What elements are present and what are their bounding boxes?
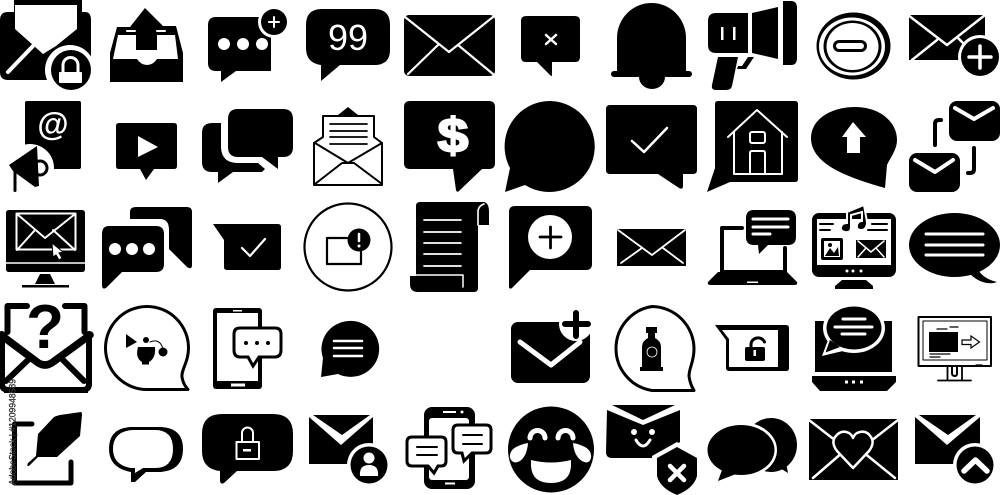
icon: oval speech bubble with lines: [909, 213, 1000, 283]
icon: smartphone with two chat bubbles: [407, 407, 491, 489]
icon: mail with up chevron badge: [915, 415, 997, 487]
icon: envelope with plus badge: [908, 15, 1000, 79]
icon: lotion bottle bubble: [616, 306, 694, 390]
icon: round speech bubble: [505, 101, 595, 192]
icon: padlock bubble: [202, 414, 293, 484]
icon: open envelope with letter: [314, 107, 382, 185]
icon: unlocked padlock in tablet bubble: [715, 325, 789, 371]
icon: at sign page with megaphone: [6, 101, 81, 192]
icon: alert window in circle: [304, 204, 392, 290]
icon: megaphone: [708, 1, 797, 90]
icon: smartphone with dots bubble: [213, 308, 281, 389]
icon: paper scroll: [410, 202, 489, 292]
icon: upload bubble: [811, 107, 897, 188]
icon: closed envelope: [404, 15, 495, 76]
icon: envelope with question mark: [1, 293, 90, 393]
icon: desktop monitor with mail and cursor: [6, 210, 85, 288]
icon: laptop with oval bubble: [812, 303, 896, 391]
icon: plus bubble: [509, 206, 592, 289]
icon: inbox tray with upload arrow: [110, 8, 183, 82]
icon: envelope with padlock: [0, 0, 95, 95]
icon: play bubble: [116, 123, 177, 180]
icon: house bubble: [707, 101, 798, 192]
icon: two oval speech bubbles: [705, 418, 797, 481]
icon: bubble with cross: [521, 16, 580, 76]
icon: laughing emoji: [508, 406, 594, 492]
icon: notification bell: [611, 3, 692, 89]
icon: check bubble: [606, 105, 697, 189]
icon: feather quill editing: [14, 412, 82, 483]
icon: check bubble with side tail: [213, 224, 281, 270]
icon: computer with music and mail: [812, 205, 896, 289]
icon: small envelope: [617, 229, 686, 266]
icon: small round bubble with lines: [321, 321, 379, 377]
icon: two overlapping chat bubbles: [202, 109, 293, 183]
icon: envelope with question mark: ?: [26, 293, 64, 362]
icon: chat bubbles with dots: [102, 207, 192, 289]
icon: outlined thick speech bubble: [109, 427, 183, 482]
icon: minus in circle: [816, 12, 890, 80]
icon: monitor with arrow window: [918, 317, 991, 380]
icon: envelope with heart: [809, 419, 898, 480]
icon: chat bubble with dots and plus badge: [208, 6, 290, 82]
icon: mail with user badge: [309, 415, 391, 487]
vertical image id strip: AdobeStock | #1209948589: [8, 379, 18, 485]
icon: dollar bubble: [404, 101, 495, 192]
icon: at sign page with megaphone: @: [37, 106, 69, 142]
icon: speech bubble with 99: [306, 9, 390, 81]
icon: laptop with message bubble: [708, 210, 797, 285]
icon: dollar bubble: $: [438, 108, 469, 162]
icon: exchanging mail: [909, 101, 1000, 192]
icon: speech bubble with 99: 99: [328, 17, 368, 58]
icon: perfume bottle bubble: [106, 306, 188, 390]
icon: mail with plus: [511, 307, 593, 383]
icon: smiling mail with shield cross: [606, 405, 702, 495]
